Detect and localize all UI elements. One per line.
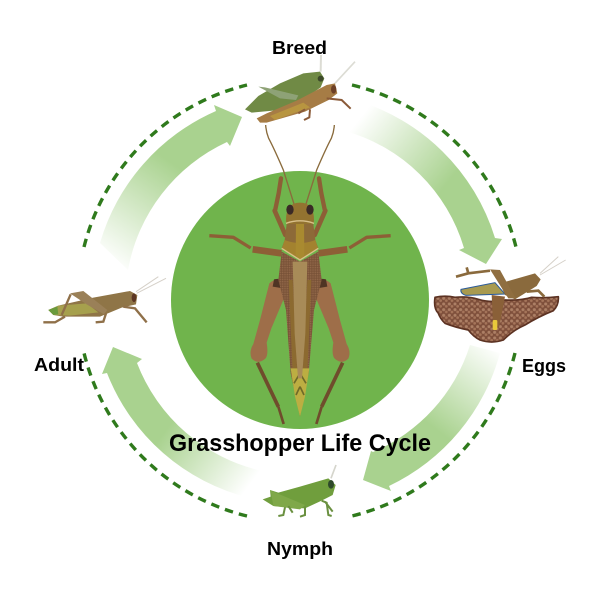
middle legs [209,236,391,253]
arrow: nymph to adult [102,347,262,498]
body [263,478,336,508]
femur shading [273,279,284,288]
eye [132,293,136,302]
eye [328,480,334,489]
label: breed: Breed [272,37,327,58]
grasshopper: adult [43,277,166,322]
grasshoppers: breed [245,55,355,123]
femur highlight [271,491,305,509]
egg [493,320,497,330]
wing [461,283,505,295]
green circle [171,171,429,429]
hind femur [70,291,107,314]
central wing stripe [293,262,307,378]
hind tibiae [257,363,343,424]
soil mound [435,296,558,342]
label: adult: Adult [34,354,84,375]
body [48,291,137,317]
grasshopper: nymph [263,465,336,517]
legs [456,267,544,297]
abdomen [48,303,98,316]
central grasshopper, top view [209,125,391,424]
green grasshopper [245,55,324,113]
legs [43,294,147,322]
eyes [286,205,294,215]
legs [278,501,333,517]
antennae [136,277,166,293]
dashed ring: top-right arc [352,85,516,247]
hind femur [490,269,516,298]
arrow: adult to breed [100,105,242,270]
arrow: breed to eggs [345,100,502,264]
label: eggs: Eggs [522,356,566,376]
dashed ring: top-left arc [84,85,247,247]
label: nymph: Nymph [267,538,333,559]
dashed ring: bottom-right arc [352,353,515,516]
head [286,203,314,224]
abdomen in soil [492,295,505,327]
body [500,273,541,299]
antenna [331,465,336,478]
arrow: eggs to nymph [363,345,500,491]
brown grasshopper [257,62,355,123]
antennae [266,125,334,204]
hind femurs [250,280,285,362]
wing olive stripes [289,280,297,373]
pronotum [282,222,318,260]
abdomen and wings [278,252,322,417]
front legs [275,178,325,235]
antennae [540,257,566,275]
grasshopper laying eggs in soil [435,257,566,342]
wing tip [291,368,309,417]
dashed ring: bottom-left arc [84,353,247,516]
title: Grasshopper Life Cycle [169,430,431,457]
